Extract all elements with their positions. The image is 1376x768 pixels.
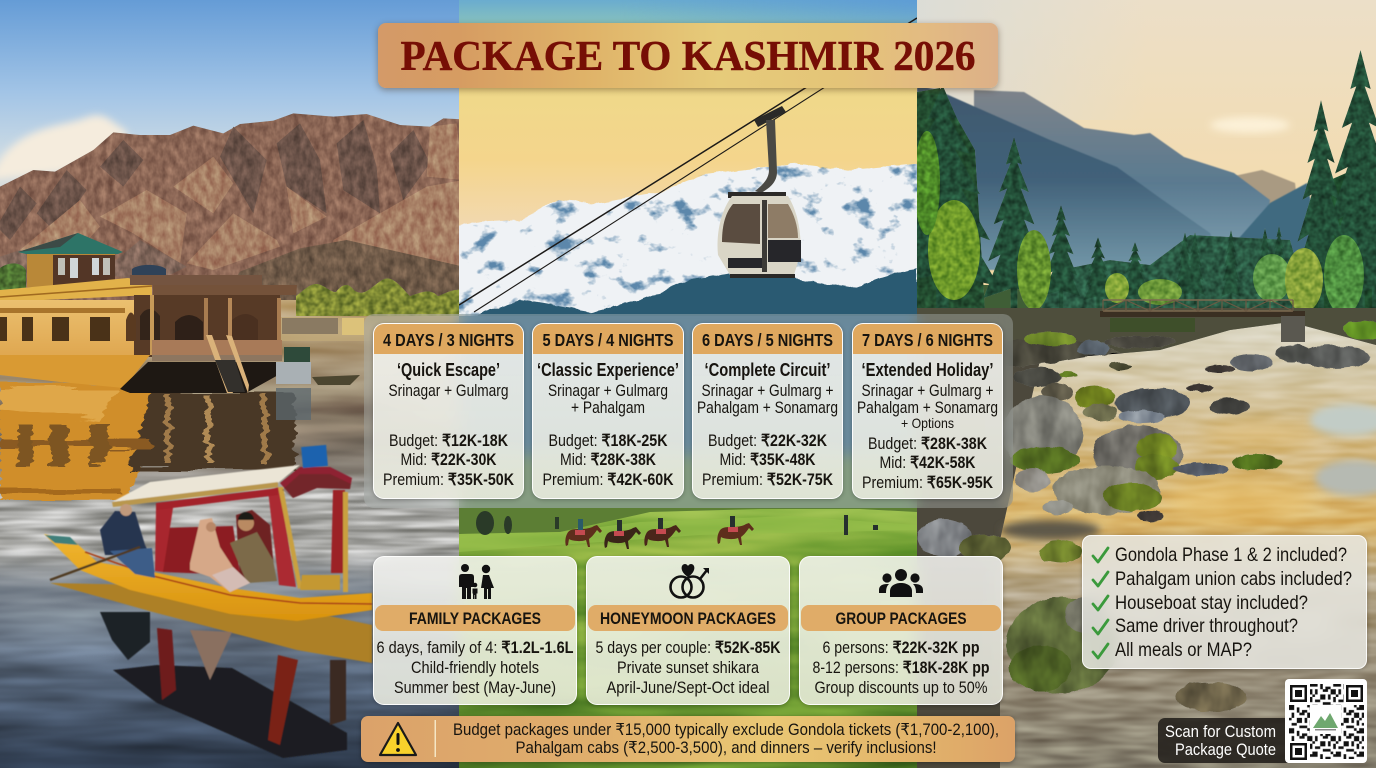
- card: honeymoon packages: [586, 556, 790, 705]
- card: 5 days / 4 nights: Mid: ₹28K-38K: [560, 451, 656, 469]
- photo: Gulmarg gondola over snow mountain: [450, 0, 925, 768]
- card: group packages: 8-12 persons: ₹18K-28K pp: [812, 659, 990, 677]
- card: 6 days / 5 nights: [692, 323, 843, 499]
- QR caption: Package Quote: [1175, 741, 1276, 759]
- QR caption: Scan for Custom: [1165, 723, 1276, 741]
- card: 6 days / 5 nights: Budget: ₹22K-32K: [708, 432, 827, 450]
- wooden footbridge: [1100, 300, 1305, 342]
- card: family packages: Child-friendly hotels: [411, 659, 539, 677]
- QR caption: [1158, 718, 1288, 763]
- card: 7 days / 6 nights: Budget: ₹28K-38K: [868, 435, 987, 453]
- icon: rings and heart: [670, 564, 709, 598]
- card: group packages: GROUP PACKAGES: [836, 609, 966, 628]
- card: group packages: 6 persons: ₹22K-32K pp: [822, 639, 980, 657]
- card: 6 days / 5 nights: Mid: ₹35K-48K: [720, 451, 816, 469]
- card: group packages: [799, 556, 1003, 705]
- houseboat: [0, 233, 360, 420]
- itinerary panel backdrop: [364, 314, 1013, 508]
- warning banner: Pahalgam cabs (₹2,500-3,500), and dinners – verify inclusions!: [516, 739, 936, 757]
- card: 5 days / 4 nights: [532, 323, 684, 499]
- card: 4 days / 3 nights: Budget: ₹12K-18K: [389, 432, 508, 450]
- card: 5 days / 4 nights: Budget: ₹18K-25K: [548, 432, 668, 450]
- card: honeymoon packages: 5 days per couple: ₹52K-85K: [596, 639, 781, 657]
- gondola cables: [459, 18, 917, 312]
- photo: Dal Lake houseboat and shikara: [0, 0, 465, 768]
- title banner: [378, 23, 998, 88]
- checklist panel: Same driver throughout?: [1115, 615, 1298, 637]
- card: family packages: Summer best (May-June): [394, 679, 556, 697]
- card: family packages: FAMILY PACKAGES: [409, 609, 541, 628]
- reflection of houseboat in water: [0, 384, 296, 500]
- card: honeymoon packages: Private sunset shikara: [617, 659, 760, 677]
- card: 4 days / 3 nights: Premium: ₹35K-50K: [383, 471, 514, 489]
- checklist panel: All meals or MAP?: [1115, 639, 1252, 661]
- card: family packages: [373, 556, 577, 705]
- icon: family: [459, 564, 494, 599]
- checklist panel: [1082, 535, 1367, 669]
- warning banner: [361, 716, 1015, 762]
- gondola cabin: [718, 106, 801, 278]
- meadow with horse riders: [459, 508, 917, 768]
- icon: warning triangle: [380, 723, 416, 755]
- card: 5 days / 4 nights: + Pahalgam: [571, 399, 645, 417]
- conifer forests: [917, 50, 1376, 308]
- card: 7 days / 6 nights: Premium: ₹65K-95K: [862, 474, 993, 492]
- river: [1000, 322, 1376, 768]
- card: 7 days / 6 nights: Mid: ₹42K-58K: [880, 454, 976, 472]
- river bank rocks: [917, 320, 1376, 712]
- QR centre logo: [1310, 705, 1341, 734]
- card: 7 days / 6 nights: + Options: [901, 415, 954, 431]
- title banner: PACKAGE TO KASHMIR 2026: [400, 34, 976, 80]
- card: 4 days / 3 nights: Mid: ₹22K-30K: [400, 451, 497, 469]
- check marks: [1093, 548, 1108, 658]
- photo: Pahalgam valley river: [886, 0, 1376, 768]
- far shore trees: [0, 263, 465, 316]
- icon: group of people: [879, 569, 923, 597]
- checklist panel: Houseboat stay included?: [1115, 592, 1308, 614]
- card: 6 days / 5 nights: Premium: ₹52K-75K: [702, 471, 833, 489]
- card: 4 days / 3 nights: [373, 323, 524, 499]
- card: 5 days / 4 nights: Premium: ₹42K-60K: [542, 471, 674, 489]
- shikara boat with passengers: [44, 445, 372, 621]
- shikara reflection: [50, 583, 372, 758]
- card: 7 days / 6 nights: [852, 323, 1003, 499]
- card: honeymoon packages: April-June/Sept-Oct ideal: [606, 679, 770, 697]
- card: 4 days / 3 nights: ‘Quick Escape’: [397, 360, 500, 380]
- QR code: [1285, 679, 1367, 763]
